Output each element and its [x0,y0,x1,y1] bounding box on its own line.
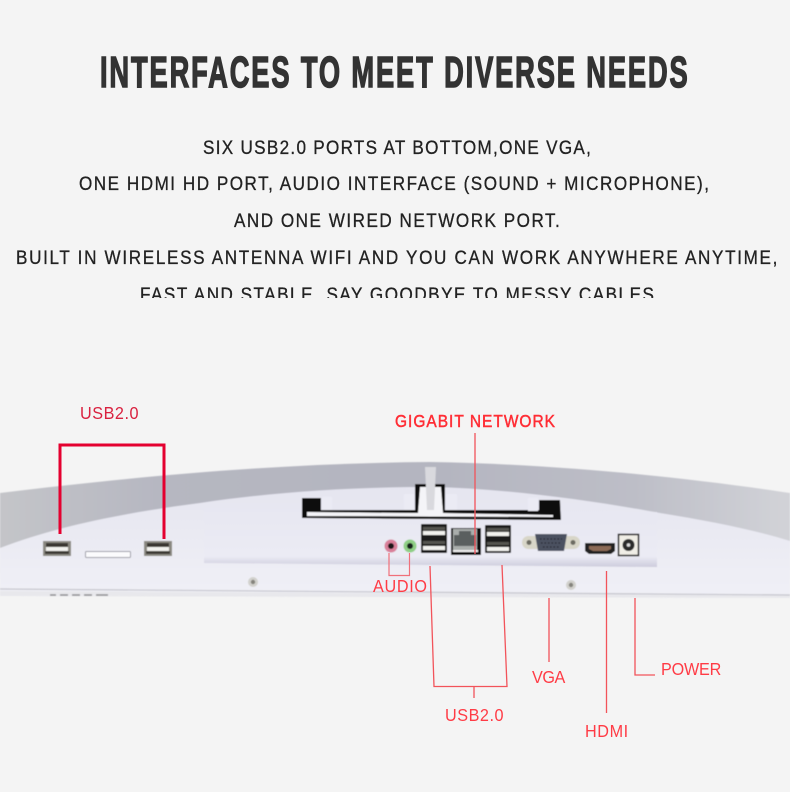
audio jack pink [384,540,398,552]
USB2.0 bottom callout [430,565,507,725]
label: VGA: VGA [532,667,566,687]
description text block [16,137,777,305]
USB port left [43,541,71,556]
monitor underside photo [0,462,790,598]
label: HDMI: HDMI [585,721,628,741]
label: USB2.0 left: USB2.0 [80,403,139,423]
USB port right [144,541,172,556]
label: power: POWER [661,659,721,679]
LAN port [451,528,481,555]
HDMI port [585,543,615,554]
description text block: BUILT IN WIRELESS ANTENNA WIFI AND YOU CAN WORK ANYWHERE ANYTIME, [16,247,777,268]
card slot [86,552,130,558]
leader: HDMI [606,571,608,713]
screw left [248,577,258,587]
stand slot [302,467,561,520]
bottom seam [0,589,790,595]
monitor face [0,487,790,595]
bracket: USB2.0 left [60,445,164,539]
screw right [566,580,576,590]
monitor lower edge [0,590,790,598]
description text block: ONE HDMI HD PORT, AUDIO INTERFACE (SOUND + MICROPHONE), [79,173,709,194]
leader: power [635,598,655,675]
VGA port [522,534,580,551]
recessed port panel [204,508,657,567]
dual USB left [421,524,447,553]
monitor grey rim [0,462,790,560]
dual USB right [485,525,511,553]
label: gigabit: GIGABIT NETWORK [395,411,555,431]
audio jack green [404,540,416,552]
leader: VGA [548,598,550,662]
description text block: SIX USB2.0 PORTS AT BOTTOM,ONE VGA, [203,137,591,158]
power callout [635,598,721,679]
label: USB2.0 bottom: USB2.0 [445,705,504,725]
USB2.0 left callout [60,403,164,539]
description text block: AND ONE WIRED NETWORK PORT. [234,210,560,231]
label: audio: AUDIO [373,576,427,596]
power port [618,534,638,556]
description text block: FAST AND STABLE, SAY GOODBYE TO MESSY CABLES [140,284,654,305]
audio callout [373,553,427,596]
bracket: USB2.0 bottom [430,565,507,698]
title: INTERFACES TO MEET DIVERSE NEEDS [100,47,688,97]
VGA callout [532,598,566,687]
small marks under edge [50,594,108,596]
bracket: audio [389,553,410,576]
leader: gigabit [474,433,476,554]
